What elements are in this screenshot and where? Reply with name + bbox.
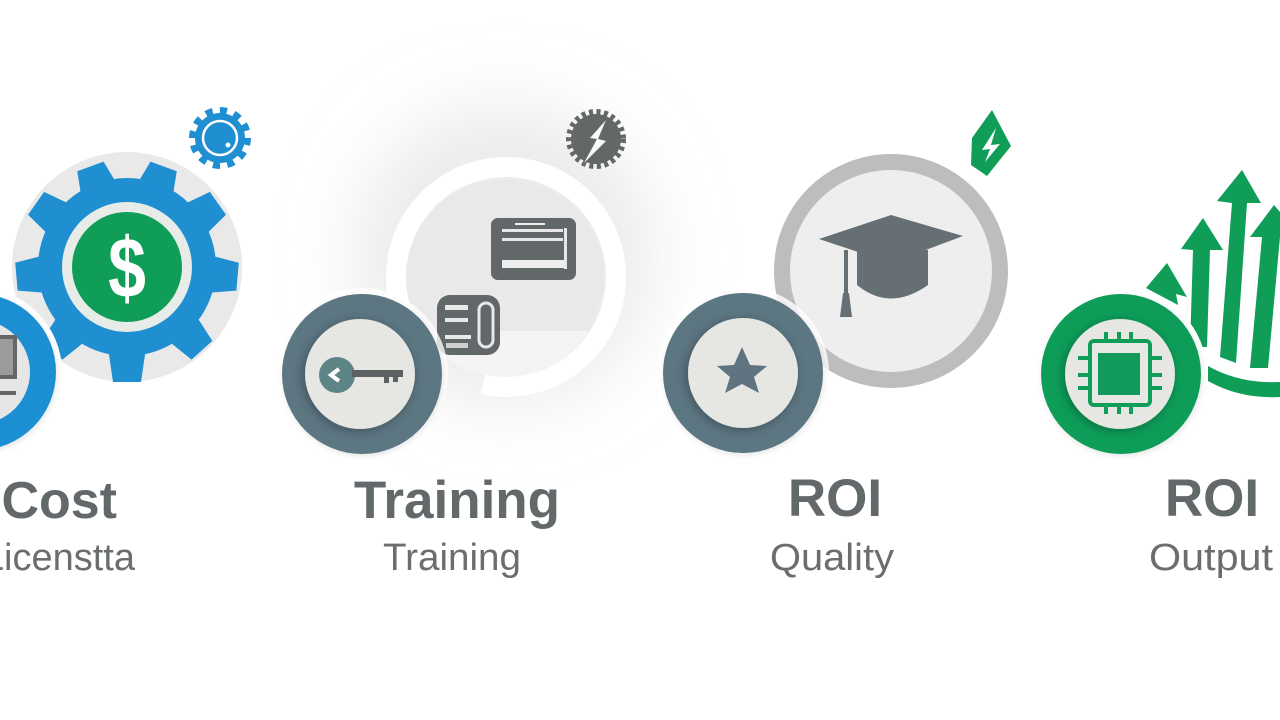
- panel: quality ROI: [657, 110, 1011, 579]
- icon: green bolt: [971, 110, 1011, 176]
- text: quality: Quality: [770, 537, 894, 579]
- heading: ROI: ROI: [1165, 469, 1259, 528]
- text: output: Output: [1149, 537, 1273, 579]
- icon: graduation cap: [782, 162, 1000, 380]
- panel: cost: [0, 111, 247, 579]
- icon: small blue gear: [193, 111, 247, 165]
- icon: large blue gear with dollar: $: [108, 221, 146, 316]
- icon: laptop badge: [0, 288, 62, 456]
- icon: card: [491, 218, 576, 280]
- icon: chip badge: [1035, 288, 1207, 460]
- icon: large blue gear with dollar: [12, 152, 242, 382]
- infographic: [0, 102, 1280, 578]
- icon: machine: [437, 295, 500, 355]
- panel: output ROI: [1035, 170, 1280, 579]
- soft glow: [355, 105, 655, 405]
- heading: cost: Cost: [1, 472, 117, 530]
- icon: key badge: [276, 288, 448, 460]
- icon: small bolt gear: [569, 112, 623, 166]
- icon: star badge: [657, 287, 829, 459]
- panel: training: [276, 105, 655, 579]
- text: training: Training: [383, 537, 521, 579]
- heading: ROI: ROI: [788, 469, 882, 528]
- heading: training: Training: [354, 471, 560, 530]
- icon: ring: [396, 167, 616, 387]
- icon: green arrows: [1146, 170, 1280, 397]
